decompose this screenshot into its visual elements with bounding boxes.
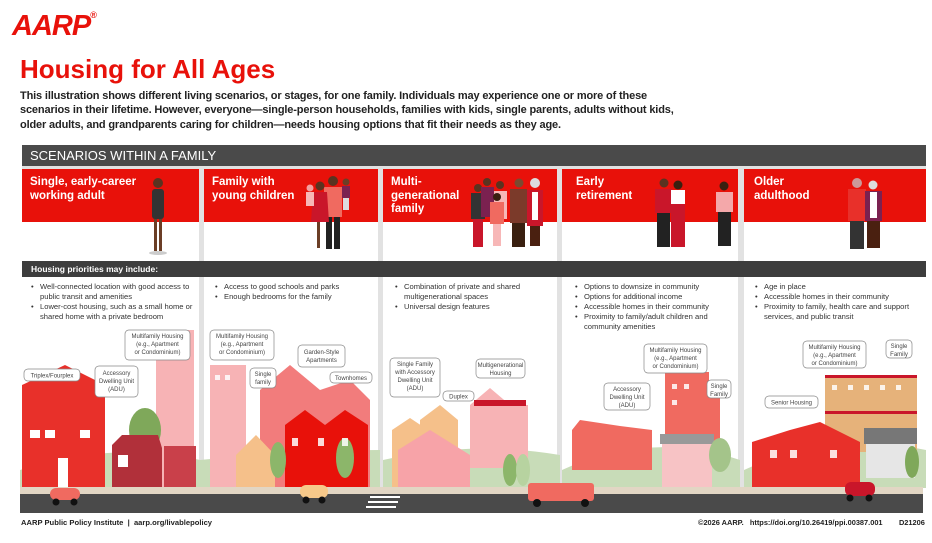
priorities: older adulthood: Accessible homes in their community bbox=[764, 292, 889, 301]
street illustration: (e.g., Apartment bbox=[221, 342, 264, 348]
panel header: multigenerational bbox=[383, 169, 557, 222]
panel header: early retirement bbox=[562, 169, 738, 222]
street illustration: Dwelling Unit bbox=[99, 379, 134, 385]
col 2 buildings bbox=[210, 365, 370, 488]
title: Housing for All Ages bbox=[20, 54, 275, 84]
priorities: early retirement: Proximity to family/adult children and community amenities bbox=[584, 312, 708, 331]
header band: scenarios: SCENARIOS WITHIN A FAMILY bbox=[30, 148, 216, 163]
figure: early retirement bbox=[655, 178, 733, 247]
priorities band bbox=[22, 261, 926, 277]
panel header: family with children: Family with bbox=[212, 176, 275, 188]
street illustration: with Accessory bbox=[394, 370, 435, 376]
priorities: multigenerational: Combination of private and shared multigenerational spaces bbox=[404, 282, 520, 301]
priorities: older adulthood bbox=[755, 282, 910, 321]
street illustration: Multifamily Housing bbox=[808, 345, 861, 351]
intro text: This illustration shows different living scenarios, or stages, for one family. Individuals may experience one or more of these scenarios in their lifetime. However, everyone—single-person households, families with kids, single parents, adults without kids, older adults, and grandparents caring for children—needs housing options that fit their needs as they age. bbox=[20, 90, 674, 131]
vehicles bbox=[50, 482, 875, 507]
background gray frame bbox=[22, 145, 926, 497]
people figures bbox=[149, 176, 882, 255]
street illustration: Family bbox=[890, 352, 908, 358]
priorities: early retirement bbox=[575, 282, 709, 331]
figure: family bbox=[306, 176, 350, 249]
figure: single adult bbox=[149, 178, 167, 255]
street illustration: family bbox=[255, 380, 271, 386]
priorities: multigenerational: Universal design features bbox=[404, 302, 490, 311]
priorities: early retirement: Options for additional income bbox=[584, 292, 682, 301]
street illustration: Single bbox=[255, 372, 272, 378]
priorities: older adulthood: Age in place bbox=[764, 282, 806, 291]
street illustration: (e.g., Apartment bbox=[813, 353, 856, 359]
panel header: multigenerational: generational bbox=[391, 190, 459, 202]
panel header: single adult: Single, early-career bbox=[30, 176, 136, 188]
street illustration: Housing bbox=[489, 371, 512, 377]
panel header: older adulthood: Older bbox=[754, 176, 784, 188]
street illustration: or Condominium) bbox=[652, 364, 699, 370]
panel header: family with children: young children bbox=[212, 190, 294, 202]
street illustration: Garden-Style bbox=[304, 350, 340, 356]
priorities: single adult bbox=[31, 282, 192, 321]
panel header: family with children bbox=[204, 169, 378, 222]
street illustration: Multifamily Housing bbox=[216, 334, 268, 340]
street illustration: Townhomes bbox=[335, 376, 367, 382]
street illustration: (ADU) bbox=[407, 386, 423, 392]
panel header: older adulthood bbox=[744, 169, 926, 222]
priorities: older adulthood: Proximity to family, health care and support services, and public transit bbox=[764, 302, 909, 321]
col 1 buildings bbox=[22, 330, 196, 488]
street illustration: Multigenerational bbox=[478, 363, 523, 369]
street illustration: (ADU) bbox=[619, 403, 635, 409]
street illustration: Single bbox=[711, 384, 728, 390]
panel header: multigenerational: Multi- bbox=[391, 176, 422, 188]
street illustration: Multifamily Housing bbox=[649, 348, 702, 354]
priorities: family: Access to good schools and parks bbox=[224, 282, 339, 291]
street illustration: or Condominium) bbox=[811, 361, 858, 367]
street illustration: (e.g., Apartment bbox=[136, 342, 179, 348]
footer left: AARP Public Policy Institute | aarp.org/livablepolicy bbox=[21, 518, 212, 527]
panel header: single adult: working adult bbox=[30, 190, 105, 202]
panel header: single adult bbox=[22, 169, 199, 222]
panel header: early retirement: retirement bbox=[576, 190, 632, 202]
sidewalk and road bbox=[20, 487, 923, 513]
street illustration: Dwelling Unit bbox=[397, 378, 433, 384]
street illustration: Accessory bbox=[103, 371, 130, 377]
street illustration: (ADU) bbox=[108, 387, 125, 393]
street illustration: Apartments bbox=[306, 358, 337, 364]
priorities: early retirement: Options to downsize in community bbox=[584, 282, 699, 291]
footer right: ©2026 AARP. https://doi.org/10.26419/ppi.00387.001 D21206 bbox=[698, 518, 925, 527]
street illustration: Senior Housing bbox=[771, 400, 812, 406]
street illustration: Triplex/Fourplex bbox=[31, 374, 73, 380]
street illustration: or Condominium) bbox=[134, 350, 181, 356]
callout labels bbox=[24, 330, 912, 410]
priorities band: Housing priorities may include: bbox=[31, 264, 158, 274]
header band: scenarios bbox=[22, 145, 926, 166]
windows generic bbox=[162, 340, 901, 458]
panel header: older adulthood: adulthood bbox=[754, 190, 810, 202]
col 3 buildings bbox=[392, 388, 530, 488]
street illustration: Duplex bbox=[449, 394, 468, 400]
street illustration: Accessory bbox=[613, 387, 641, 393]
priorities: early retirement: Accessible homes in their community bbox=[584, 302, 709, 311]
panel header: early retirement: Early bbox=[576, 176, 604, 188]
street illustration: Family bbox=[710, 392, 728, 398]
street illustration: Dwelling Unit bbox=[609, 395, 645, 401]
street illustration bbox=[20, 330, 926, 513]
figure: multigenerational family bbox=[471, 178, 543, 247]
street illustration: Single bbox=[891, 344, 908, 350]
logo: AARP: AARP® bbox=[12, 10, 96, 42]
figure: older couple bbox=[848, 178, 882, 249]
column backgrounds bbox=[22, 169, 199, 499]
priorities: family bbox=[215, 282, 339, 301]
street illustration: (e.g., Apartment bbox=[654, 356, 697, 362]
col 5 buildings bbox=[752, 375, 919, 488]
priorities: multigenerational bbox=[395, 282, 520, 311]
street illustration: or Condominium) bbox=[219, 350, 265, 356]
priorities: single adult: Lower-cost housing, such as a small home or shared home with a private bedroom bbox=[40, 302, 192, 321]
priorities: single adult: Well-connected location with good access to public transit and amenities bbox=[40, 282, 189, 301]
street illustration: Single Family bbox=[397, 362, 433, 368]
priorities: family: Enough bedrooms for the family bbox=[224, 292, 332, 301]
col 4 buildings bbox=[572, 372, 731, 488]
street illustration: Multifamily Housing bbox=[131, 334, 184, 340]
hills bbox=[20, 443, 926, 488]
panel header: multigenerational: family bbox=[391, 203, 424, 215]
